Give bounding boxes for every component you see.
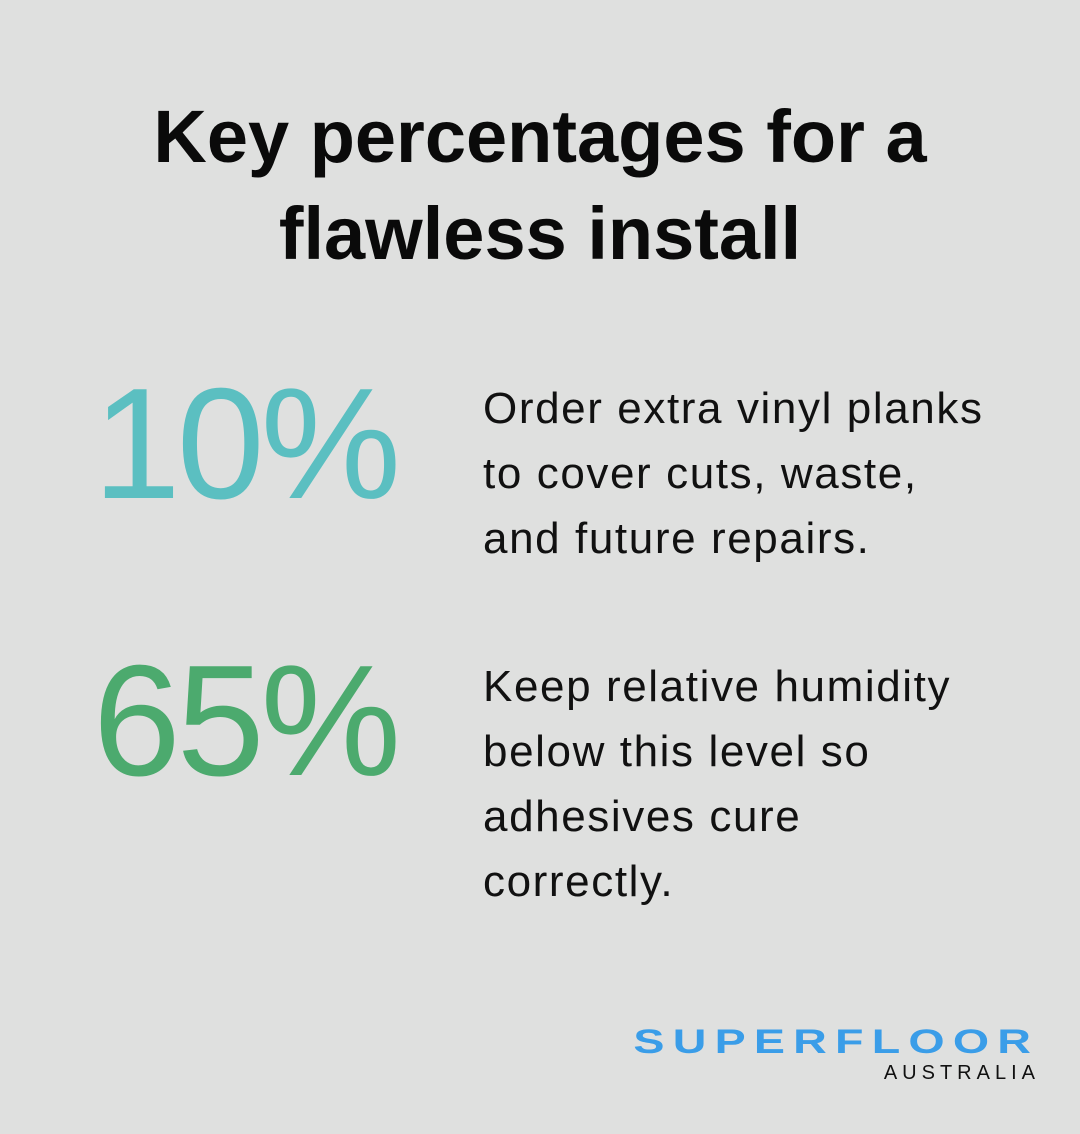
text: humidity: below this level so	[483, 727, 870, 776]
text: extra planks	[483, 384, 984, 563]
logo	[633, 1023, 1040, 1084]
text: extra planks: to cover cuts, waste,	[483, 449, 918, 498]
text: humidity: Keep relative humidity	[483, 662, 951, 711]
number 65%: 65%	[93, 633, 397, 809]
text: extra planks: Order extra vinyl planks	[483, 384, 984, 433]
title: flawless install	[279, 192, 801, 275]
title	[153, 95, 928, 275]
text: humidity: correctly.	[483, 857, 674, 906]
text: humidity	[483, 662, 951, 906]
logo: AUSTRALIA: AUSTRALIA	[884, 1062, 1040, 1084]
title: Key percentages for a	[153, 95, 927, 178]
text: extra planks: and future repairs.	[483, 514, 870, 563]
text: humidity: adhesives cure	[483, 792, 801, 841]
logo: SUPERFLOOR: SUPERFLOOR	[633, 1023, 1039, 1061]
stat: 10%	[93, 356, 984, 563]
number 10%: 10%	[93, 356, 397, 532]
stat: 65%	[93, 633, 951, 906]
